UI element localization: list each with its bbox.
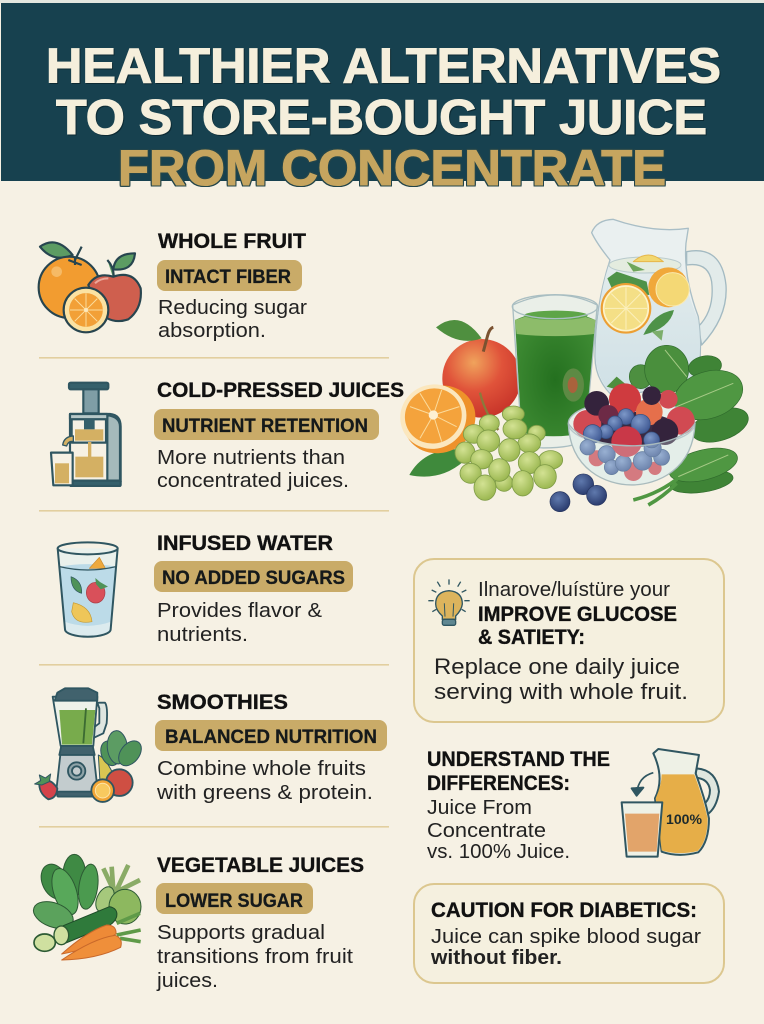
tag: NO ADDED SUGARS (162, 568, 345, 589)
callout: caution for diabetics: CAUTION FOR DIABETICS: (431, 898, 697, 922)
header banner (0, 0, 764, 196)
heading: VEGETABLE JUICES (157, 853, 364, 877)
icon: juice jug and glass (622, 749, 719, 857)
tag (157, 260, 302, 291)
text: UNDERSTAND THE (427, 747, 610, 771)
text (427, 747, 610, 863)
panel: whole fruit (39, 229, 307, 342)
description: nutrients. (157, 623, 248, 646)
title: HEALTHIER ALTERNATIVES (46, 40, 721, 94)
panel: infused water (58, 531, 353, 646)
panel: smoothies (35, 688, 387, 804)
loose blueberries (550, 474, 607, 512)
tag: BALANCED NUTRITION (165, 727, 377, 748)
description (156, 921, 353, 992)
heading: SMOOTHIES (157, 690, 288, 714)
apple (436, 320, 521, 418)
panel: vegetable juices (30, 853, 364, 992)
description: concentrated juices. (157, 469, 349, 492)
text: vs. 100% Juice. (427, 840, 570, 863)
tag (154, 561, 353, 592)
description (156, 757, 373, 804)
description: Supports gradual (157, 921, 325, 944)
block: understand the differences (427, 747, 719, 863)
panel: cold-pressed juices (51, 378, 404, 492)
label: 100%: 100% (666, 811, 703, 827)
description: Reducing sugar (158, 296, 307, 319)
icon: juicer (51, 383, 121, 486)
tag: LOWER SUGAR (165, 891, 303, 912)
icon: vegetables (30, 854, 141, 960)
description: transitions from fruit (157, 945, 353, 968)
heading: INFUSED WATER (157, 531, 333, 555)
text: IMPROVE GLUCOSE (478, 602, 677, 626)
title (46, 40, 721, 196)
spinach leaves (629, 345, 753, 505)
text: DIFFERENCES: (427, 771, 570, 795)
tag (154, 409, 379, 440)
heading: WHOLE FRUIT (158, 229, 306, 253)
description: Provides flavor & (157, 599, 322, 622)
tag: NUTRIENT RETENTION (162, 416, 368, 437)
hero illustration: fruit, juice and pitcher (390, 219, 753, 512)
text: serving with whole fruit. (434, 679, 688, 704)
description: absorption. (158, 319, 266, 342)
callout: caution for diabetics: without fiber. (430, 946, 562, 969)
text: Ilnarove/luístüre your (478, 578, 670, 601)
callout: caution for diabetics: Juice can spike blood sugar (431, 925, 701, 948)
heading: COLD-PRESSED JUICES (157, 378, 404, 402)
description (158, 296, 307, 342)
grapes (455, 393, 563, 500)
text: Concentrate (427, 819, 546, 842)
description (157, 599, 322, 646)
description: juices. (156, 969, 218, 992)
callout: caution for diabetics (414, 884, 724, 983)
text: Replace one daily juice (434, 654, 680, 679)
text: & SATIETY: (478, 625, 585, 649)
tag (155, 720, 387, 751)
callout: improve glucose and satiety (414, 559, 724, 722)
description (157, 446, 349, 492)
icon: glass of infused water (58, 542, 118, 637)
description: More nutrients than (157, 446, 345, 469)
berry bowl (568, 377, 695, 485)
icon: orange and apple (39, 242, 141, 332)
description: with greens & protein. (156, 781, 373, 804)
tag (156, 883, 313, 914)
text (434, 578, 688, 704)
pitcher (592, 219, 726, 397)
text: Juice From (427, 796, 532, 819)
icon: blender with fruit (35, 688, 146, 802)
title: TO STORE-BOUGHT JUICE (56, 91, 707, 145)
icon: light bulb (428, 579, 470, 625)
green juice glass (512, 295, 598, 448)
tag: INTACT FIBER (165, 267, 291, 288)
description: Combine whole fruits (157, 757, 366, 780)
title: FROM CONCENTRATE (118, 140, 666, 196)
orange half (390, 374, 487, 477)
